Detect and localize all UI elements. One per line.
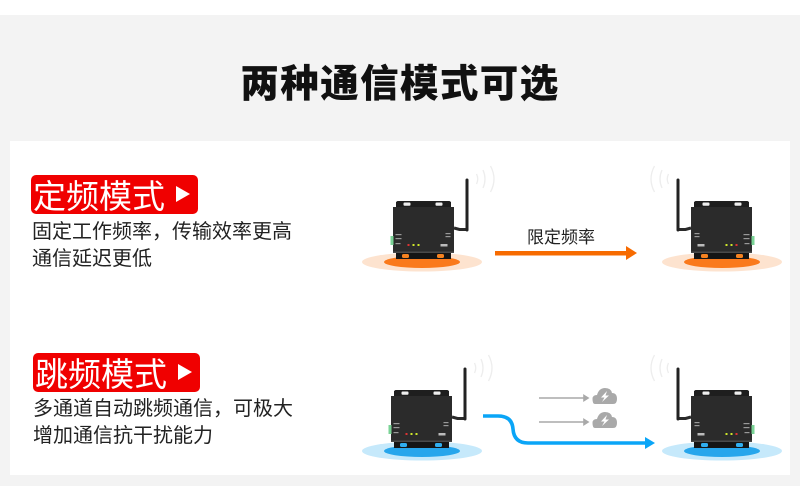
icon: interference cloud lower [592, 412, 617, 428]
text: frequency hopping description: 多通道自动跳频通信，可极大 [33, 398, 293, 420]
arrow: blue hopping link [483, 416, 655, 449]
arrow label: fixed frequency: 限定频率 [527, 228, 595, 247]
title: 两种通信模式可选 [240, 63, 560, 106]
badge: fixed frequency mode: 定频模式 [33, 178, 165, 215]
arrow: orange fixed link [495, 246, 637, 260]
device: hopping mode sender [362, 355, 492, 460]
text: frequency hopping description: 增加通信抗干扰能力 [33, 425, 213, 447]
device: hopping mode receiver [651, 355, 782, 460]
badge: frequency hopping mode: 跳频模式 [35, 356, 167, 393]
icon: interference cloud upper [592, 388, 617, 404]
panel: white content area [10, 141, 790, 475]
arrow: grey interference upper [539, 396, 588, 400]
device: fixed mode sender [362, 166, 494, 272]
arrow: grey interference lower [539, 420, 588, 424]
text: fixed frequency description: 固定工作频率，传输效率更高 [32, 221, 292, 243]
device: fixed mode receiver [651, 166, 782, 272]
text: frequency hopping description [33, 398, 293, 447]
text: fixed frequency description: 通信延迟更低 [32, 248, 152, 270]
text: fixed frequency description [32, 221, 292, 270]
